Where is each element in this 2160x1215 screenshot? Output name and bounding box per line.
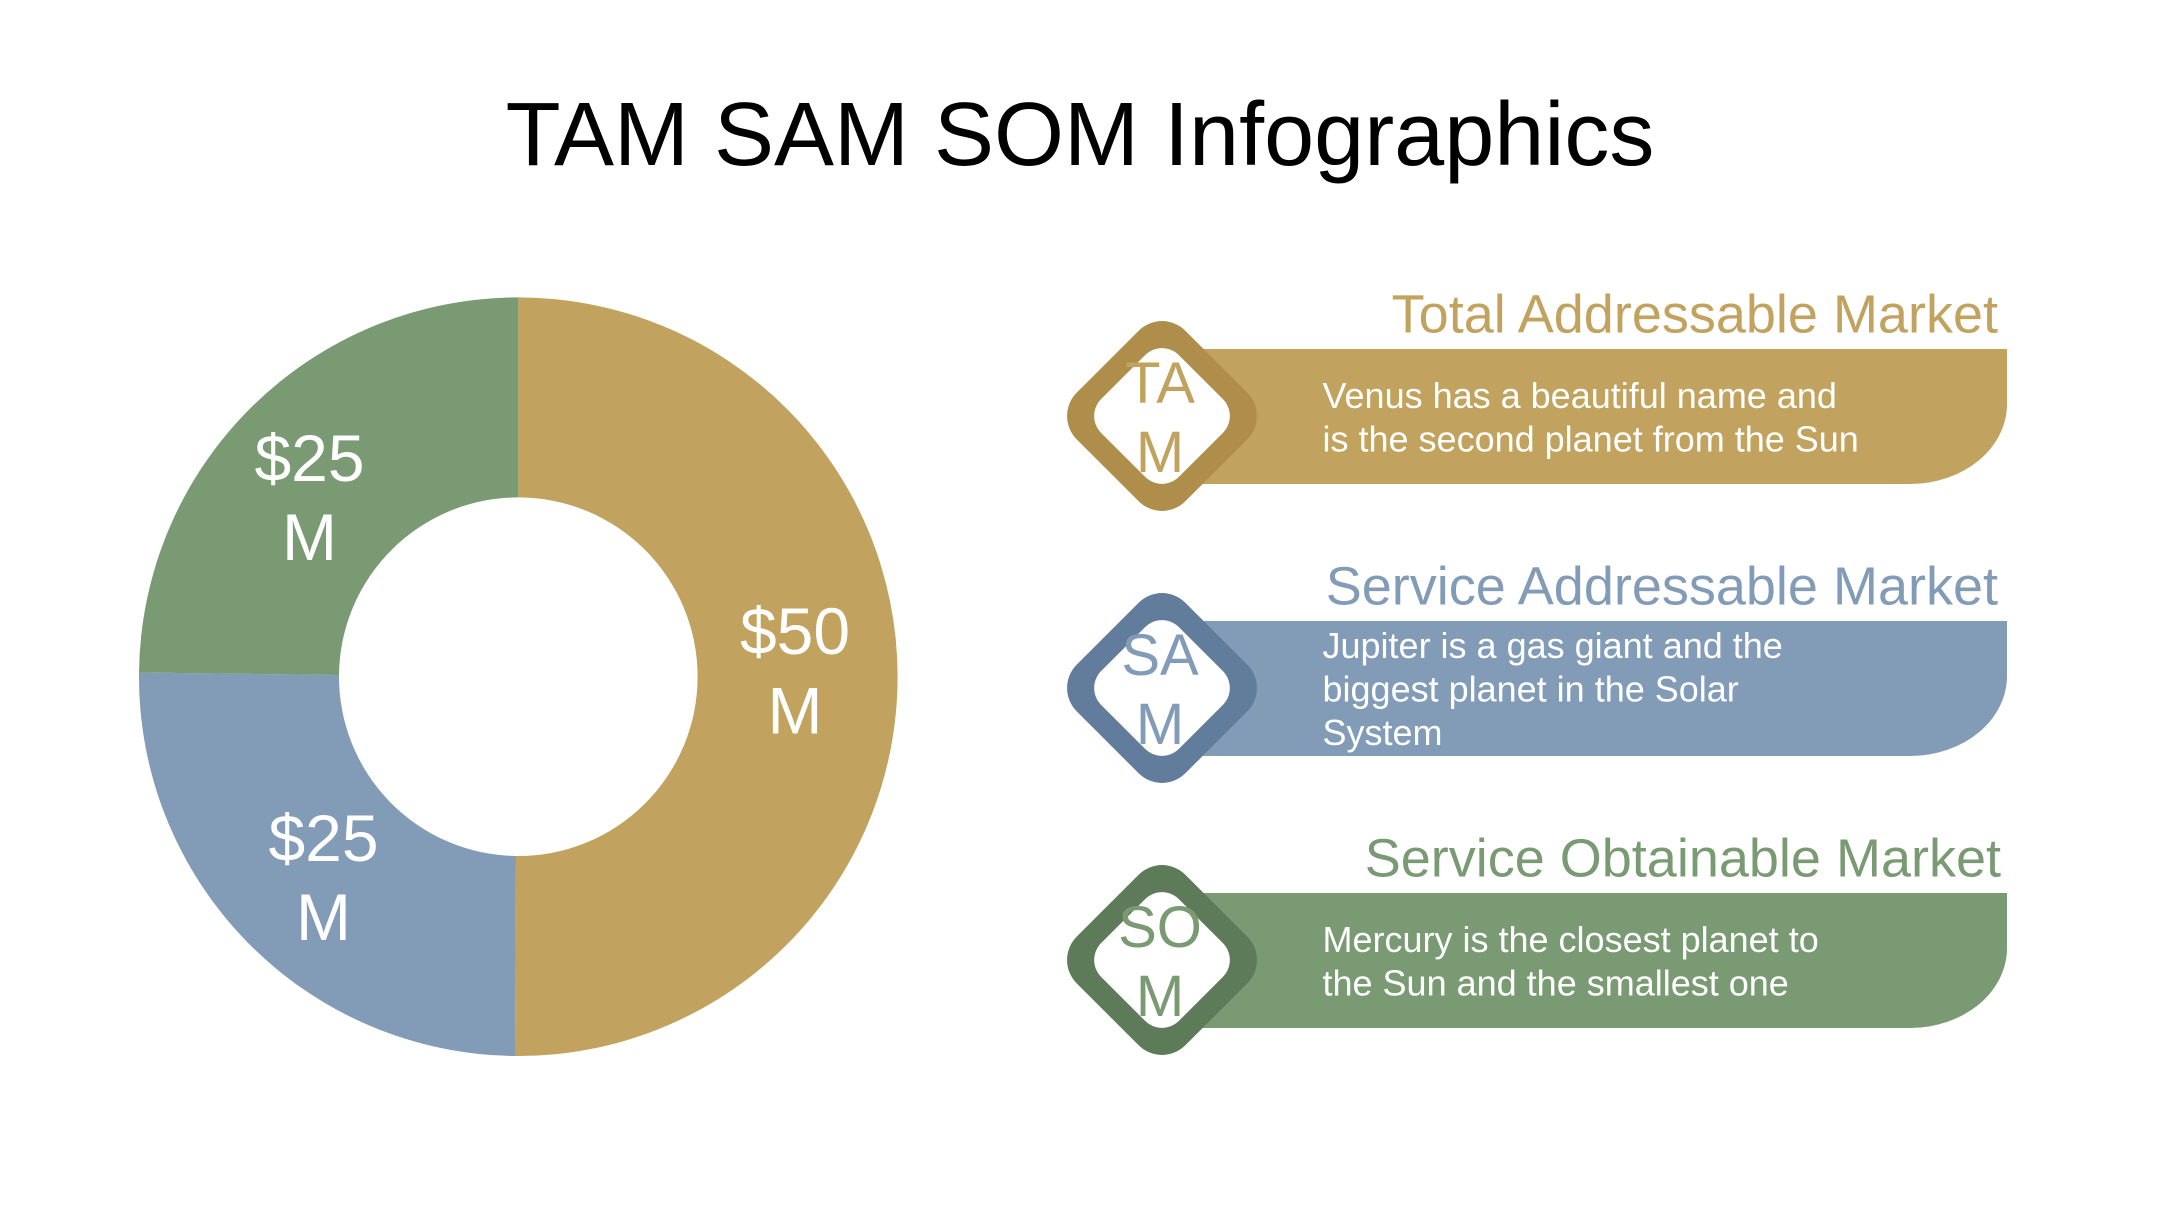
heading: Service Addressable Market: Service Addressable Market — [1326, 556, 1998, 616]
bar — [1162, 621, 2007, 756]
panel: Total Addressable Market — [1053, 284, 2007, 525]
label: $25 M blue: $25 — [268, 801, 379, 875]
panel: Service Addressable Market — [1053, 556, 2007, 797]
icon: diamond badge SAM — [1053, 579, 1271, 797]
segment: SOM 25% — [139, 297, 518, 675]
icon: diamond badge TAM: TA — [1125, 351, 1195, 416]
heading: Service Obtainable Market: Service Obtainable Market — [1365, 828, 2001, 888]
description: the Sun and the smallest one — [1322, 962, 1789, 1004]
icon: diamond badge SOM: M — [1136, 964, 1184, 1029]
icon: diamond badge SAM: M — [1136, 692, 1184, 757]
description: Mercury is the closest planet to — [1322, 919, 1819, 960]
bar — [1162, 349, 2007, 484]
segment: SAM 25% — [139, 672, 516, 1056]
label: $50 M: $50 — [740, 594, 850, 668]
label: $25 M green: $25 — [254, 421, 365, 495]
description: Venus has a beautiful name and — [1322, 375, 1837, 416]
description: is the second planet from the Sun — [1322, 418, 1859, 460]
icon: diamond badge SOM: SO — [1118, 895, 1202, 960]
description: System — [1322, 712, 1443, 753]
icon: diamond badge SOM — [1053, 851, 1271, 1069]
label: $25 M blue: M — [296, 880, 351, 954]
segment: TAM 50% — [515, 297, 898, 1056]
label: $50 M: M — [768, 674, 822, 748]
icon: diamond badge SAM: SA — [1121, 623, 1199, 688]
description: biggest planet in the Solar — [1322, 668, 1739, 710]
donut chart — [139, 297, 898, 1056]
bar — [1162, 893, 2007, 1028]
description: Jupiter is a gas giant and the — [1322, 625, 1783, 666]
label: $25 M green: M — [282, 500, 337, 574]
heading: Total Addressable Market: Total Addressable Market — [1392, 284, 1998, 344]
title: TAM SAM SOM Infographics — [506, 85, 1654, 185]
panel: Service Obtainable Market — [1053, 828, 2007, 1069]
icon: diamond badge TAM: M — [1136, 420, 1184, 485]
icon: diamond badge TAM — [1053, 307, 1271, 525]
